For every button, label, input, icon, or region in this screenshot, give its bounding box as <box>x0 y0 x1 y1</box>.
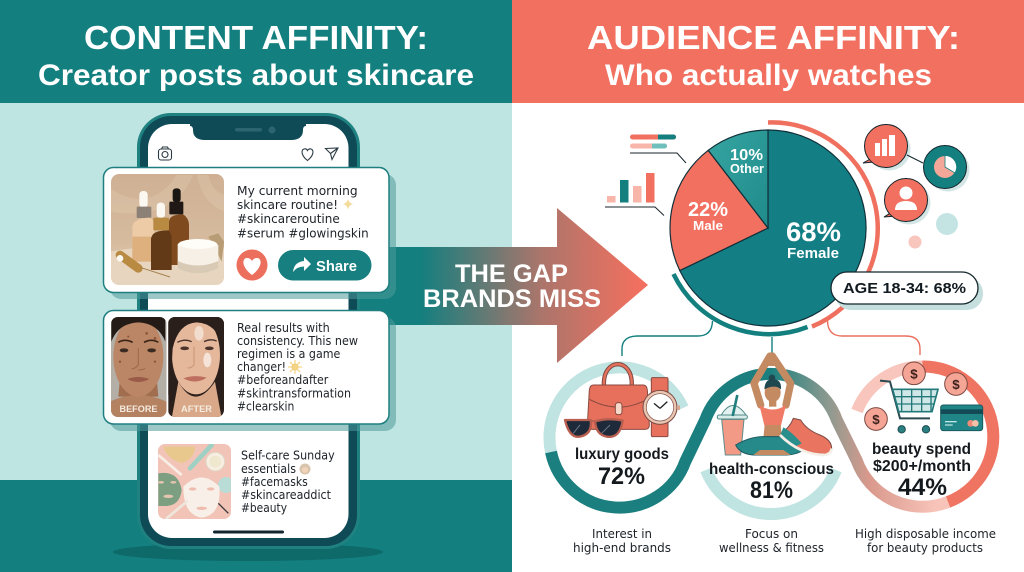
post 1 caption: skincare routine! <box>237 197 338 212</box>
post 3 <box>157 443 335 520</box>
gap arrow: BRANDS MISS <box>423 285 601 313</box>
post card 1 <box>104 168 396 299</box>
post 2 caption: #clearskin <box>237 400 294 414</box>
label: 68% female: 68% <box>786 217 841 247</box>
header: audience affinity <box>512 0 1024 103</box>
phone notch <box>190 122 306 140</box>
label: 22% male <box>688 199 728 233</box>
age badge <box>831 272 983 310</box>
right background panel <box>512 103 1024 572</box>
home indicator <box>213 530 284 534</box>
mini legend bars <box>630 134 686 163</box>
icon: shopping: $ <box>872 412 880 427</box>
photo: before <box>110 317 167 418</box>
post 2 caption: changer! <box>237 360 286 374</box>
label: 22% male: Male <box>693 218 723 233</box>
icon: pie bubble <box>924 146 970 192</box>
icon: shopping: $ <box>952 377 960 392</box>
stat: beauty spend <box>855 362 996 555</box>
icon: camera <box>158 147 172 160</box>
icon: sparkle <box>343 199 353 210</box>
photo: after <box>168 316 225 418</box>
beauty spend label: beauty spend <box>872 441 971 458</box>
post 3 caption: essentials <box>241 462 296 476</box>
beauty spend value: 44% <box>898 474 947 501</box>
post 1 caption: #serum #glowingskin <box>237 226 369 240</box>
share button: Share <box>316 258 357 275</box>
beauty spend caption: High disposable income <box>855 527 996 541</box>
icon: person bubble <box>884 178 930 224</box>
beauty spend caption: for beauty products <box>867 541 983 555</box>
outer arc: coral <box>768 122 878 326</box>
after label: AFTER <box>181 404 213 414</box>
luxury goods caption: high-end brands <box>573 541 671 555</box>
phone <box>137 113 360 549</box>
share button <box>278 250 372 280</box>
icon: shopping: $ <box>910 366 918 381</box>
post 3 caption: #beauty <box>241 501 287 515</box>
post 2 caption: regimen is a game <box>237 347 340 361</box>
left background panel <box>0 103 512 480</box>
before label: BEFORE <box>120 404 158 414</box>
stat: luxury goods <box>565 364 680 555</box>
post 3 caption: #facemasks <box>241 475 308 489</box>
beauty spend label <box>872 441 971 475</box>
stat: health-conscious <box>709 353 834 555</box>
left bottom band <box>0 480 512 572</box>
icon: send <box>326 148 338 160</box>
post 1 caption: #skincareroutine <box>237 211 340 226</box>
connector lines <box>622 321 920 358</box>
beauty spend caption <box>855 527 996 555</box>
header: content affinity: CONTENT AFFINITY: <box>84 19 428 56</box>
icon: wellness <box>717 353 832 455</box>
slice: male <box>670 150 768 271</box>
post 2 caption: #beforeandafter <box>237 373 328 387</box>
post 3 caption: #skincareaddict <box>241 488 331 502</box>
header: content affinity: Creator posts about skincare <box>38 59 474 92</box>
icon: heart outline <box>302 149 313 160</box>
label: 10% other: 10% <box>730 147 763 164</box>
photo: serum bottles <box>110 173 225 287</box>
post 2 caption: Real results with <box>237 321 330 335</box>
label: 22% male: 22% <box>688 199 728 221</box>
icon: sun sparkle <box>288 360 302 374</box>
decorative dot: teal <box>936 213 958 235</box>
beauty spend label: $200+/month <box>873 458 971 475</box>
post 1 caption <box>237 183 369 240</box>
health-conscious caption: Focus on <box>745 527 798 541</box>
header: audience affinity: AUDIENCE AFFINITY: <box>587 19 960 56</box>
decorative dot: coral <box>908 236 922 248</box>
wave rings <box>549 366 993 514</box>
post card 2 <box>104 310 396 431</box>
header: audience affinity: Who actually watches <box>605 59 932 92</box>
bubble connector <box>907 155 923 163</box>
icon: spa emoji <box>300 464 310 474</box>
post 3 caption <box>241 448 335 515</box>
luxury goods caption: Interest in <box>592 527 652 541</box>
mini bar chart <box>605 173 664 216</box>
phone ground shadow <box>113 543 383 561</box>
header: content affinity <box>0 0 512 103</box>
health-conscious label: health-conscious <box>709 461 834 478</box>
gap arrow <box>360 208 648 363</box>
pie chart <box>670 122 878 334</box>
health-conscious caption: wellness & fitness <box>719 541 824 555</box>
post 2 caption: consistency. This new <box>237 334 358 348</box>
post 2 caption: #skintransformation <box>237 386 351 400</box>
gap arrow: THE GAP <box>455 260 568 288</box>
icon: chart bubble <box>863 124 910 170</box>
label: 68% female: Female <box>787 245 839 262</box>
outer arc: teal <box>674 274 808 334</box>
post 3 caption: Self-care Sunday <box>241 448 335 462</box>
photo: face masks <box>157 443 234 520</box>
label: 10% other <box>730 147 764 176</box>
post 1 caption: My current morning <box>237 183 358 198</box>
label: 10% other: Other <box>730 162 764 176</box>
age badge: AGE 18-34: 68% <box>843 280 966 297</box>
health-conscious value: 81% <box>750 477 793 504</box>
icon: shopping <box>865 362 983 433</box>
health-conscious caption <box>719 527 824 555</box>
label: 68% female <box>786 217 841 262</box>
slice: other <box>708 130 768 228</box>
luxury goods value: 72% <box>598 463 645 490</box>
like button <box>236 250 268 280</box>
luxury goods caption <box>573 527 671 555</box>
icon: luxury goods <box>565 364 680 437</box>
slice: female <box>680 130 866 326</box>
post 2 caption <box>237 321 358 414</box>
luxury goods label: luxury goods <box>575 446 669 463</box>
